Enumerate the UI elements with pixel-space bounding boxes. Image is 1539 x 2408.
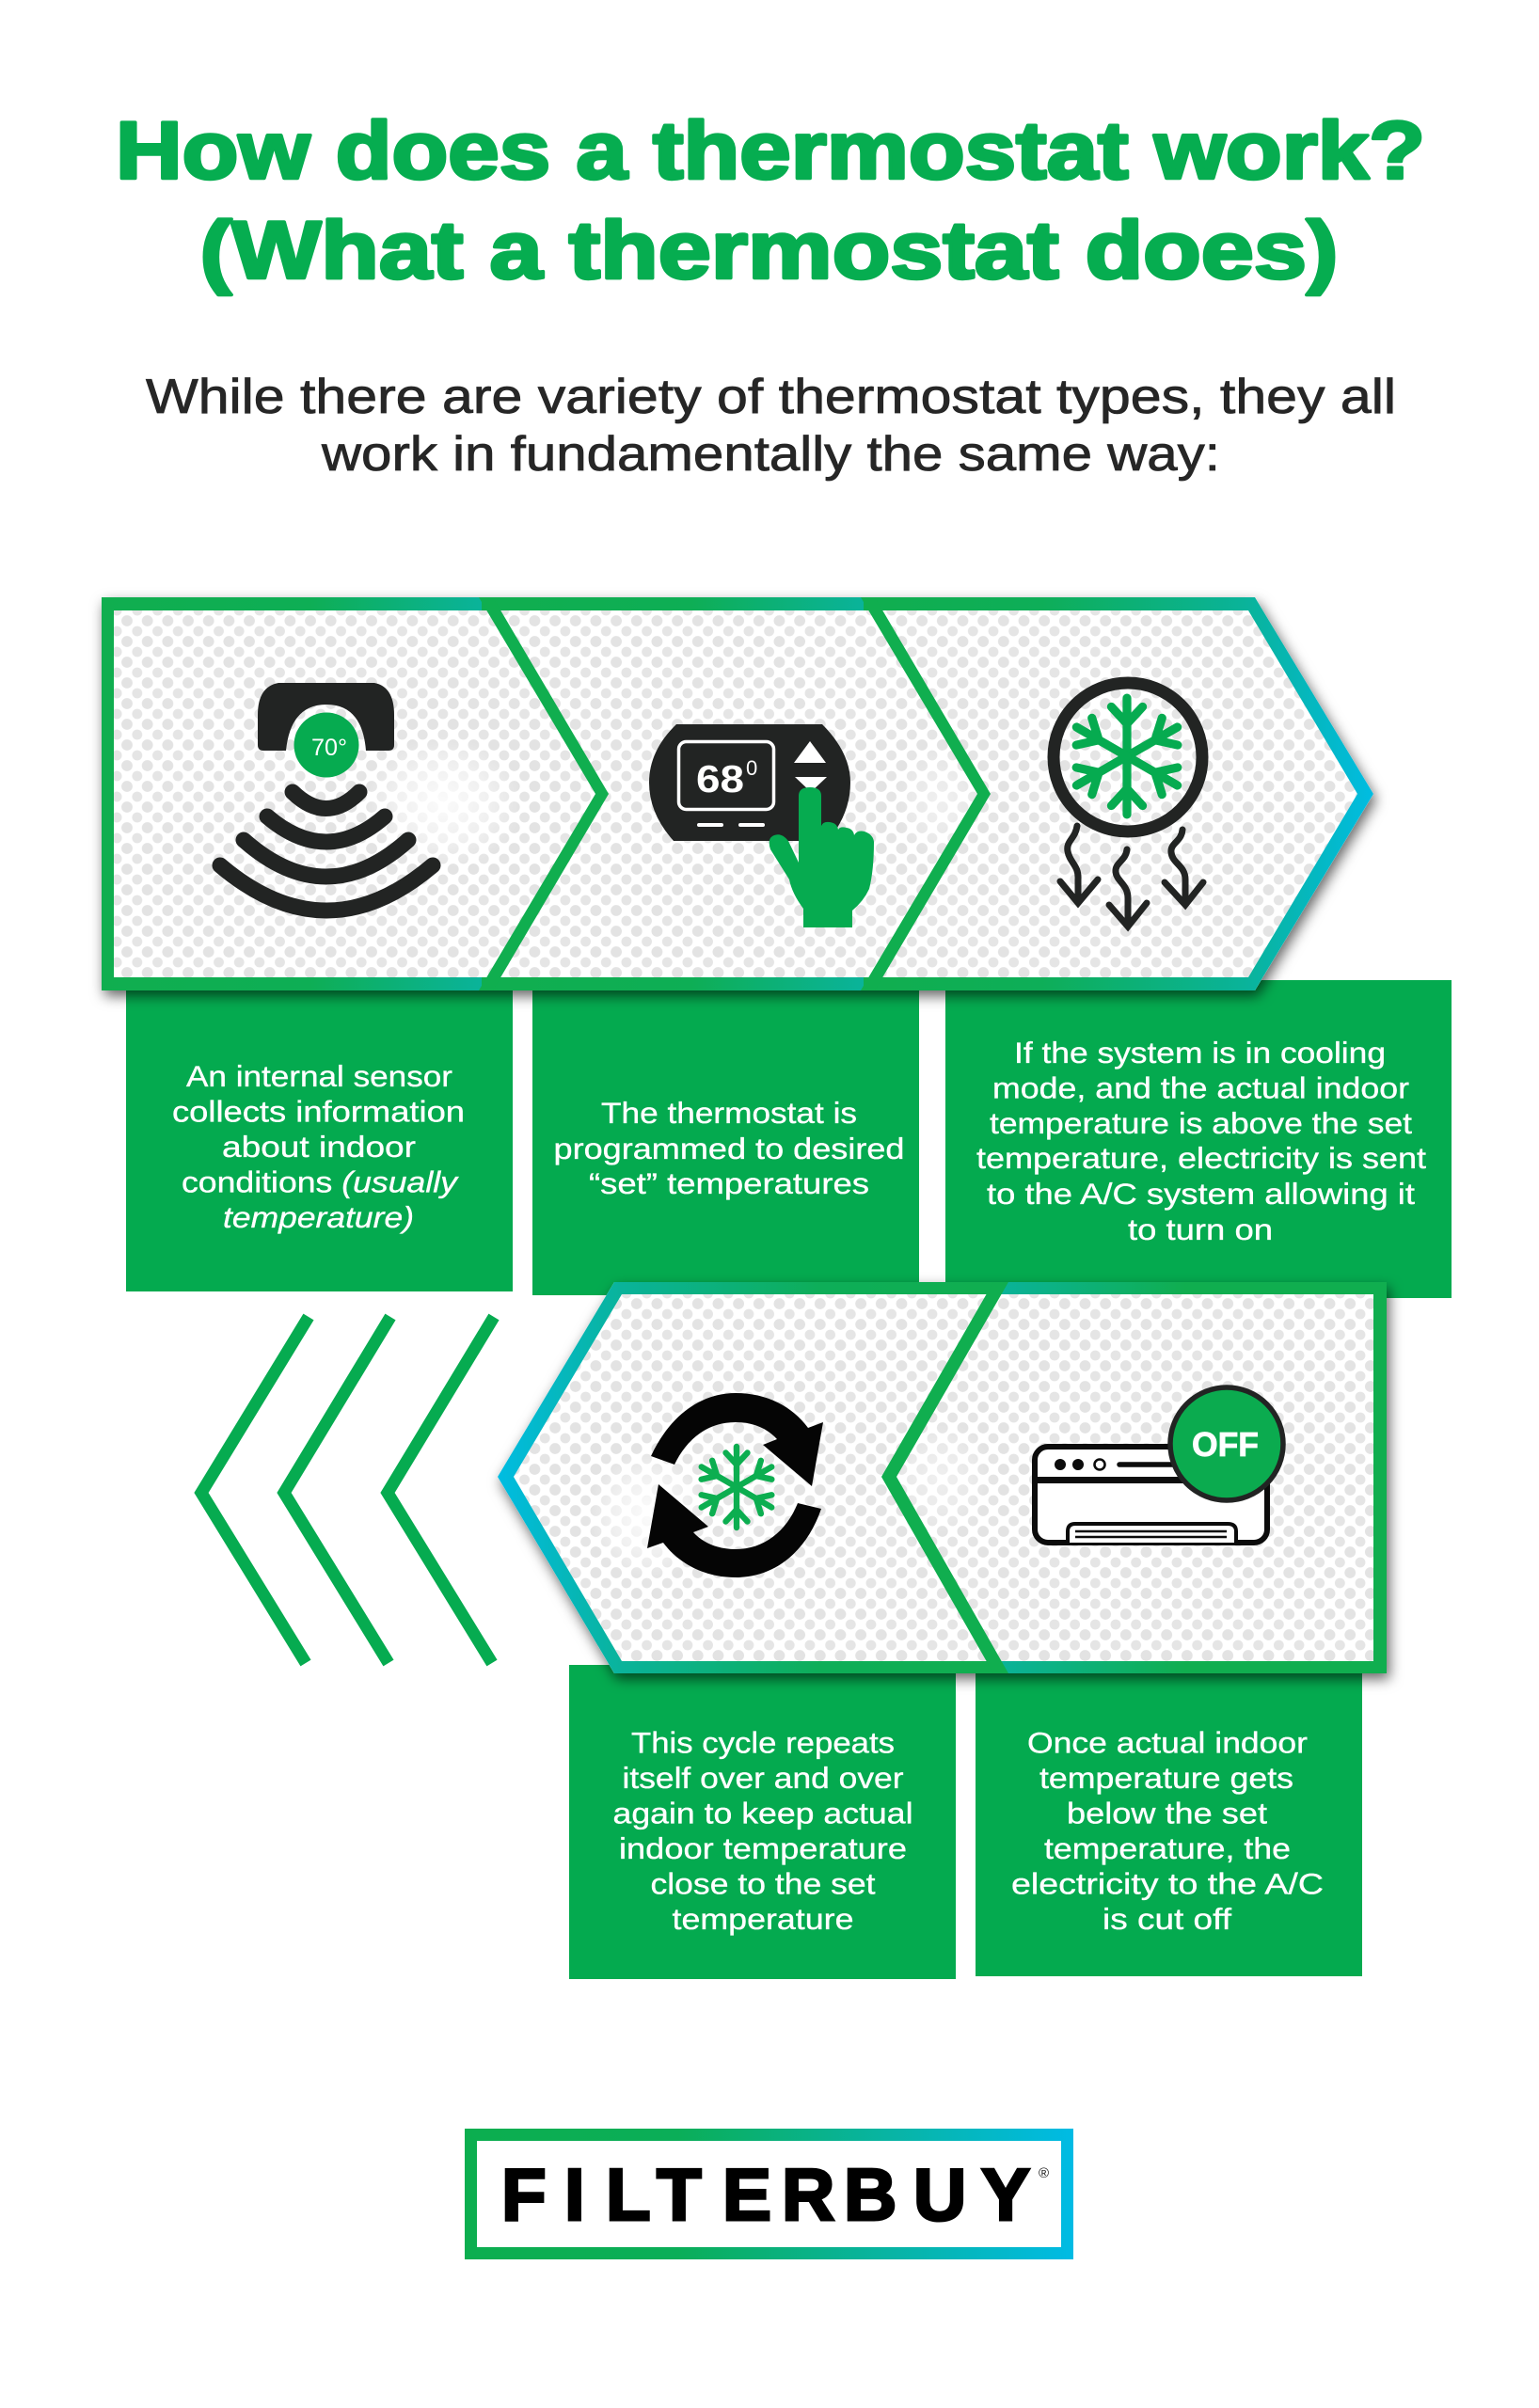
title: How does a thermostat work?	[116, 105, 1425, 196]
text box 4: cycle repeats: close to the set	[651, 1866, 876, 1900]
title: (What a thermostat does)	[199, 205, 1338, 295]
icon: snowflake in circle with cold air arrows	[1054, 683, 1203, 927]
text box 4: cycle repeats	[569, 1665, 956, 1979]
icon: programmable thermostat with hand: 0	[746, 756, 757, 780]
text box 4: cycle repeats: temperature	[672, 1902, 854, 1936]
upper arrow panel	[102, 597, 1373, 990]
subtitle: While there are variety of thermostat types, they all	[146, 370, 1396, 424]
icon: room sensor with waves: 70°	[311, 735, 347, 761]
text box 3: cooling mode: temperature, electricity is sent	[976, 1141, 1426, 1175]
icon: programmable thermostat with hand: 68	[696, 757, 744, 800]
text box 4: cycle repeats: again to keep actual	[613, 1797, 912, 1830]
text box 5: electricity cut off	[976, 1665, 1362, 1976]
text box 4: cycle repeats: indoor temperature	[619, 1831, 907, 1865]
text box 1: sensor: conditions (usually	[182, 1164, 460, 1198]
text box 5: electricity cut off: below the set	[1067, 1797, 1267, 1830]
text box 4: cycle repeats: This cycle repeats	[631, 1725, 895, 1759]
text box 5: electricity cut off: Once actual indoor	[1027, 1725, 1308, 1759]
text box 5: electricity cut off: is cut off	[1103, 1902, 1231, 1936]
text box 1: sensor	[126, 978, 513, 1291]
text box 4: cycle repeats: itself over and over	[623, 1761, 903, 1795]
text box 2: programmed: The thermostat is	[601, 1096, 857, 1130]
text box 3: cooling mode: to turn on	[1128, 1212, 1273, 1246]
text box 1: sensor: temperature)	[223, 1200, 414, 1234]
text box 5: electricity cut off: temperature gets	[1039, 1761, 1293, 1795]
text box 5: electricity cut off: electricity to the A/C	[1011, 1866, 1324, 1900]
icon: air conditioner with OFF badge	[1035, 1387, 1283, 1543]
subtitle: work in fundamentally the same way:	[321, 427, 1220, 482]
icon: repeat cycle arrows with snowflake	[647, 1393, 823, 1577]
text box 1: sensor: about indoor	[222, 1130, 416, 1164]
text box 2: programmed: “set” temperatures	[589, 1166, 869, 1200]
lower arrow panel	[498, 1282, 1387, 1673]
subtitle	[146, 370, 1396, 482]
text box 3: cooling mode	[945, 980, 1452, 1298]
text box 1: sensor: An internal sensor	[186, 1059, 452, 1093]
text box 3: cooling mode: to the A/C system allowing it	[987, 1177, 1415, 1211]
text box 3: cooling mode: mode, and the actual indoor	[992, 1070, 1409, 1104]
logo: Filterbuy	[465, 2129, 1073, 2259]
text box 1: sensor: collects information	[172, 1095, 465, 1129]
text box 5: electricity cut off: temperature, the	[1044, 1831, 1291, 1865]
arrows: three chevrons pointing left	[201, 1317, 494, 1663]
title	[116, 105, 1425, 295]
text box 2: programmed: programmed to desired	[553, 1132, 905, 1165]
icon: programmable thermostat with hand	[649, 724, 874, 927]
icon: air conditioner with OFF badge: OFF	[1192, 1425, 1259, 1464]
text box 3: cooling mode: If the system is in cooling	[1014, 1036, 1386, 1069]
logo: Filterbuy: FILTERBUY	[501, 2153, 1030, 2236]
icon: room sensor with waves	[220, 683, 433, 911]
text box 2: programmed	[532, 978, 919, 1295]
logo: Filterbuy: ®	[1039, 2165, 1049, 2181]
text box 3: cooling mode: temperature is above the set	[990, 1106, 1412, 1140]
